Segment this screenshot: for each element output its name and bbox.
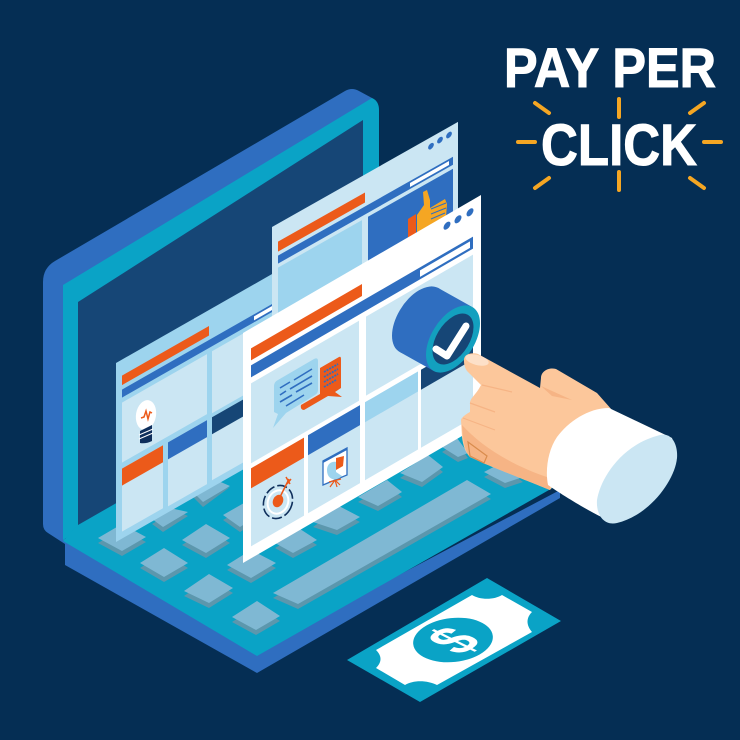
keyboard keys	[98, 438, 523, 635]
title: PAY PER	[504, 36, 716, 99]
icon: target	[258, 477, 298, 523]
laptop screen	[78, 120, 363, 525]
dollar sign: $	[412, 619, 496, 662]
title: CLICK	[541, 113, 697, 178]
laptop base	[63, 385, 560, 673]
laptop lid	[43, 89, 379, 544]
panel: front browser window	[243, 195, 481, 563]
icon: chat bubbles	[273, 357, 342, 428]
panel: left browser window	[116, 272, 276, 542]
panel: back browser window	[272, 122, 458, 337]
hand pointing	[461, 352, 612, 490]
title	[504, 36, 716, 178]
click rays	[518, 99, 721, 190]
icon: checkmark button	[392, 275, 480, 384]
dollar bill	[347, 578, 561, 702]
icon: presentation board	[323, 448, 347, 487]
icon: light bulb	[134, 398, 158, 443]
icon: thumbs up	[408, 190, 447, 240]
shirt cuff	[547, 408, 677, 523]
